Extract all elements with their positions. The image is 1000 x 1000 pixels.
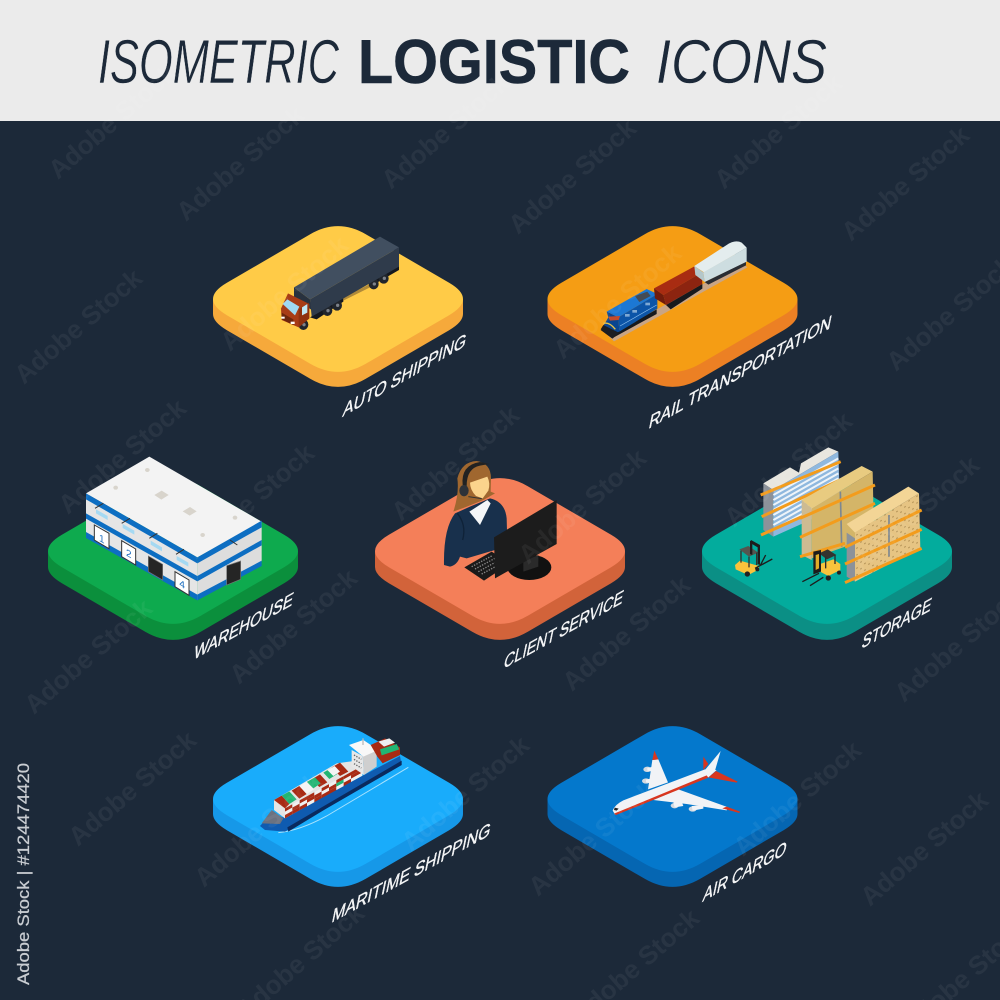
- platform: rail transportation: [548, 226, 797, 387]
- watermark: Adobe Stock: [845, 449, 985, 577]
- platform: warehouse: [48, 478, 298, 640]
- panel: auto shipping: [213, 226, 463, 387]
- header band: [0, 0, 1000, 121]
- dock door 1: [94, 525, 109, 549]
- watermark: Adobe Stock: [223, 562, 363, 690]
- forklift right: [802, 549, 841, 586]
- title: ISOMETRIC: [98, 28, 340, 97]
- watermark: Adobe Stock: [188, 765, 328, 893]
- watermark: Adobe Stock: [502, 112, 642, 240]
- icon: pallet racks and forklifts: [735, 447, 922, 586]
- title: LOGISTIC: [358, 28, 630, 97]
- forklift left: [735, 540, 772, 577]
- icon: operator at computer: [444, 461, 557, 581]
- panel: client service: [375, 461, 625, 640]
- aft containers: [371, 738, 400, 763]
- watermark: Adobe Stock: [375, 67, 515, 195]
- watermark: Adobe Stock: [708, 67, 848, 195]
- panel: rail transportation: [548, 226, 797, 387]
- watermark: Adobe Stock: [62, 724, 202, 852]
- panel: warehouse: [48, 457, 298, 640]
- icon: warehouse building: [86, 457, 262, 600]
- platform: auto shipping: [213, 226, 463, 387]
- watermark: Adobe Stock: [170, 99, 310, 227]
- rack: tan goods front: [845, 487, 922, 583]
- platform: storage: [702, 478, 952, 640]
- watermark: Adobe Stock: [512, 442, 652, 570]
- label: air cargo: AIR CARGO: [701, 837, 789, 907]
- keyboard: [464, 552, 510, 581]
- bridge: [349, 738, 378, 775]
- watermark: Adobe Stock: [854, 784, 994, 912]
- panel: air cargo: [548, 726, 797, 887]
- panel: storage: [702, 447, 952, 640]
- platform: maritime shipping: [213, 726, 463, 887]
- watermark: Adobe Stock: [522, 774, 662, 902]
- watermark: Adobe Stock: [18, 592, 158, 720]
- icon: airplane: [613, 751, 740, 815]
- label: storage: STORAGE: [860, 594, 934, 654]
- watermark: Adobe Stock: [718, 405, 858, 533]
- title: ICONS: [656, 28, 827, 97]
- icon: train: [601, 241, 747, 341]
- platform: air cargo: [548, 726, 797, 887]
- watermark: Adobe Stock: [42, 57, 182, 185]
- watermark: Adobe Stock: [727, 734, 867, 862]
- icon: truck: [281, 237, 399, 330]
- watermark: Adobe Stock: [547, 237, 687, 365]
- watermark: Adobe Stock: [214, 229, 354, 357]
- label: maritime shipping: MARITIME SHIPPING: [330, 819, 493, 928]
- watermark: Adobe Stock: [52, 392, 192, 520]
- rack: white goods: [761, 447, 841, 537]
- dock door 4: [175, 572, 189, 595]
- panel: maritime shipping: [213, 726, 463, 887]
- dock door 2: 2: [126, 547, 132, 561]
- watermark: Adobe Stock: [835, 119, 975, 247]
- watermark: Adobe Stock: [8, 262, 148, 390]
- title: [98, 28, 827, 97]
- dock door 1: 1: [99, 532, 105, 547]
- dock door 2: [122, 541, 136, 565]
- watermark: Adobe Stock: [556, 569, 696, 697]
- dock door 3: [148, 556, 163, 580]
- label: auto shipping: AUTO SHIPPING: [341, 329, 468, 422]
- stock id: Adobe Stock | #124474420: [14, 763, 33, 985]
- watermark: Adobe Stock: [395, 729, 535, 857]
- label: client service: CLIENT SERVICE: [502, 586, 625, 674]
- icon: container ship: [260, 738, 408, 833]
- watermark: Adobe Stock: [180, 437, 320, 565]
- watermark: Adobe Stock: [385, 399, 525, 527]
- rack: tan goods rear: [800, 466, 875, 560]
- label: warehouse: WAREHOUSE: [192, 589, 295, 665]
- monitor: [494, 500, 557, 580]
- platform: client service: [375, 478, 625, 640]
- label: rail transportation: RAIL TRANSPORTATION: [647, 311, 833, 434]
- containers: [274, 761, 362, 818]
- side door: [227, 561, 241, 585]
- labels: [192, 311, 934, 928]
- dock door 4: 4: [179, 578, 185, 592]
